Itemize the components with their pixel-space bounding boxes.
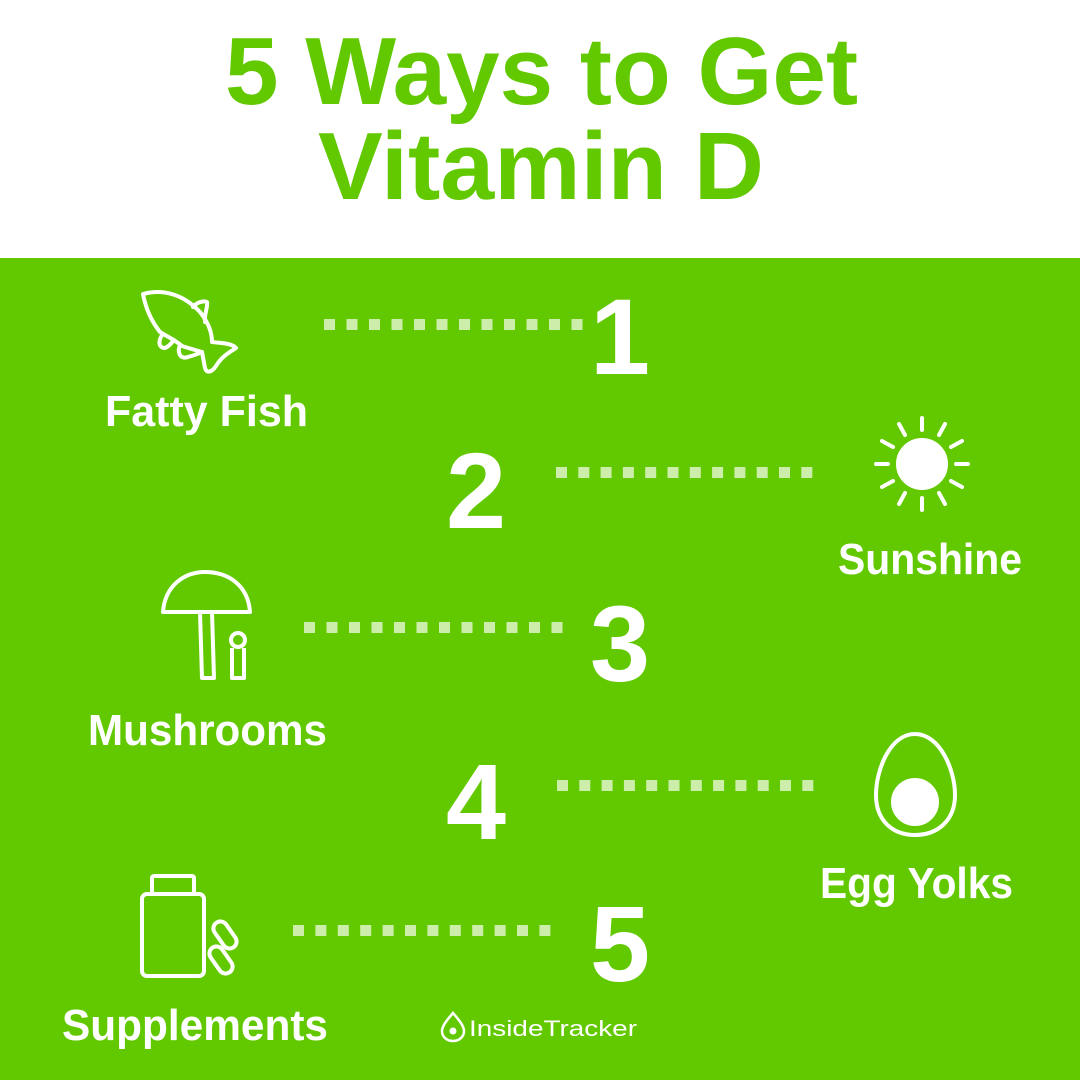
- number 3: 3: [590, 583, 650, 704]
- label: Egg Yolks: Egg Yolks: [820, 859, 1013, 908]
- number 5: 5: [590, 883, 650, 1004]
- number 4: 4: [446, 741, 506, 862]
- dotted connector 2: [556, 467, 812, 478]
- number 1: 1: [590, 276, 650, 397]
- title: 5 Ways to Get: [225, 18, 858, 125]
- dotted connector 1: [324, 319, 582, 330]
- title: [225, 18, 858, 220]
- label: Fatty Fish: Fatty Fish: [105, 387, 308, 436]
- dotted connector 5: [293, 925, 550, 936]
- label: Supplements: Supplements: [62, 1001, 328, 1050]
- dotted connector 4: [557, 780, 813, 791]
- icon: sun: [876, 418, 968, 510]
- logo: InsideTracker: InsideTracker: [469, 1016, 637, 1041]
- label: Mushrooms: Mushrooms: [88, 706, 327, 755]
- icon: egg: [876, 734, 955, 835]
- icon: mushroom: [163, 572, 250, 678]
- dotted connector 3: [304, 622, 562, 633]
- icon: supplements: [142, 876, 239, 976]
- logo: InsideTracker: [442, 1013, 637, 1041]
- icon: fish: [143, 292, 236, 372]
- number 2: 2: [446, 430, 506, 551]
- panel: green background: [0, 258, 1080, 1080]
- title: Vitamin D: [318, 113, 764, 220]
- label: Sunshine: Sunshine: [838, 535, 1022, 584]
